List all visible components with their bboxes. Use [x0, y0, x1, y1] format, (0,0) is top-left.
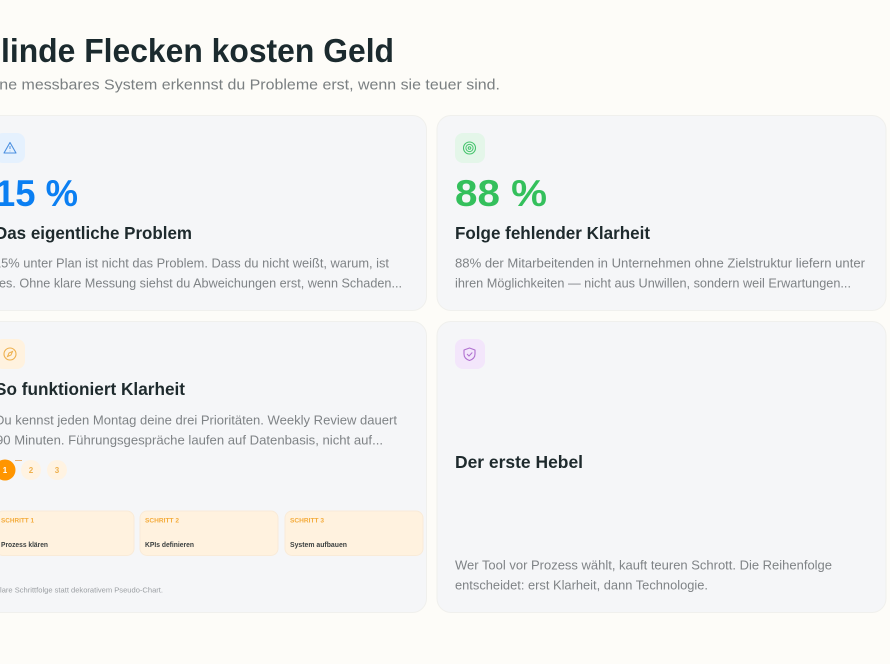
body text	[455, 558, 832, 592]
heading: Der erste Hebel	[455, 452, 583, 472]
big number: 88 %: 88 %	[455, 173, 547, 214]
step card 3: SCHRITT 3	[290, 518, 324, 524]
heading: So funktioniert Klarheit	[0, 379, 185, 399]
panel: das eigentliche Problem	[0, 116, 426, 310]
body text	[455, 256, 866, 290]
footnote: Klare Schrittfolge statt dekorativem Pseudo-Chart.	[0, 586, 163, 594]
heading: Folge fehlender Klarheit	[455, 223, 650, 243]
panel: So funktioniert Klarheit	[0, 322, 426, 612]
body text: Wer Tool vor Prozess wählt, kauft teuren Schrott. Die Reihenfolge	[455, 558, 832, 572]
step card 1	[0, 511, 134, 556]
stepper: 2	[29, 466, 34, 475]
body text: 15% unter Plan ist nicht das Problem. Dass du nicht weißt, warum, ist	[0, 256, 389, 270]
body text	[0, 256, 402, 290]
icon: shield	[455, 339, 485, 369]
panel: Der erste Hebel	[437, 322, 886, 612]
icon: warning triangle	[0, 133, 25, 163]
body text: 88% der Mitarbeitenden in Unternehmen ohne Zielstruktur liefern unter	[455, 256, 866, 270]
stepper: 1	[3, 466, 8, 475]
body text: Du kennst jeden Montag deine drei Prioritäten. Weekly Review dauert	[0, 412, 397, 428]
heading: Das eigentliche Problem	[0, 223, 192, 243]
body text	[0, 412, 397, 448]
icon: compass	[0, 339, 25, 369]
step card 2	[140, 511, 278, 556]
step card 1: SCHRITT 1	[1, 518, 34, 524]
step card 2: SCHRITT 2	[145, 518, 179, 524]
step card 1: Prozess klären	[1, 542, 48, 549]
body text: es. Ohne klare Messung siehst du Abweichungen erst, wenn Schaden...	[0, 276, 402, 290]
icon: target	[455, 133, 485, 163]
step card 3: System aufbauen	[290, 542, 347, 549]
step card 2: KPIs definieren	[145, 542, 194, 549]
body text: ihren Möglichkeiten — nicht aus Unwillen, sondern weil Erwartungen...	[455, 276, 851, 290]
body text: entscheidet: erst Klarheit, dann Technologie.	[455, 578, 708, 592]
stepper: 3	[55, 466, 60, 475]
panel: Folge fehlender Klarheit	[437, 116, 886, 310]
body text: 90 Minuten. Führungsgespräche laufen auf Datenbasis, nicht auf...	[0, 432, 383, 448]
step card 3	[285, 511, 423, 556]
stepper	[0, 460, 67, 480]
